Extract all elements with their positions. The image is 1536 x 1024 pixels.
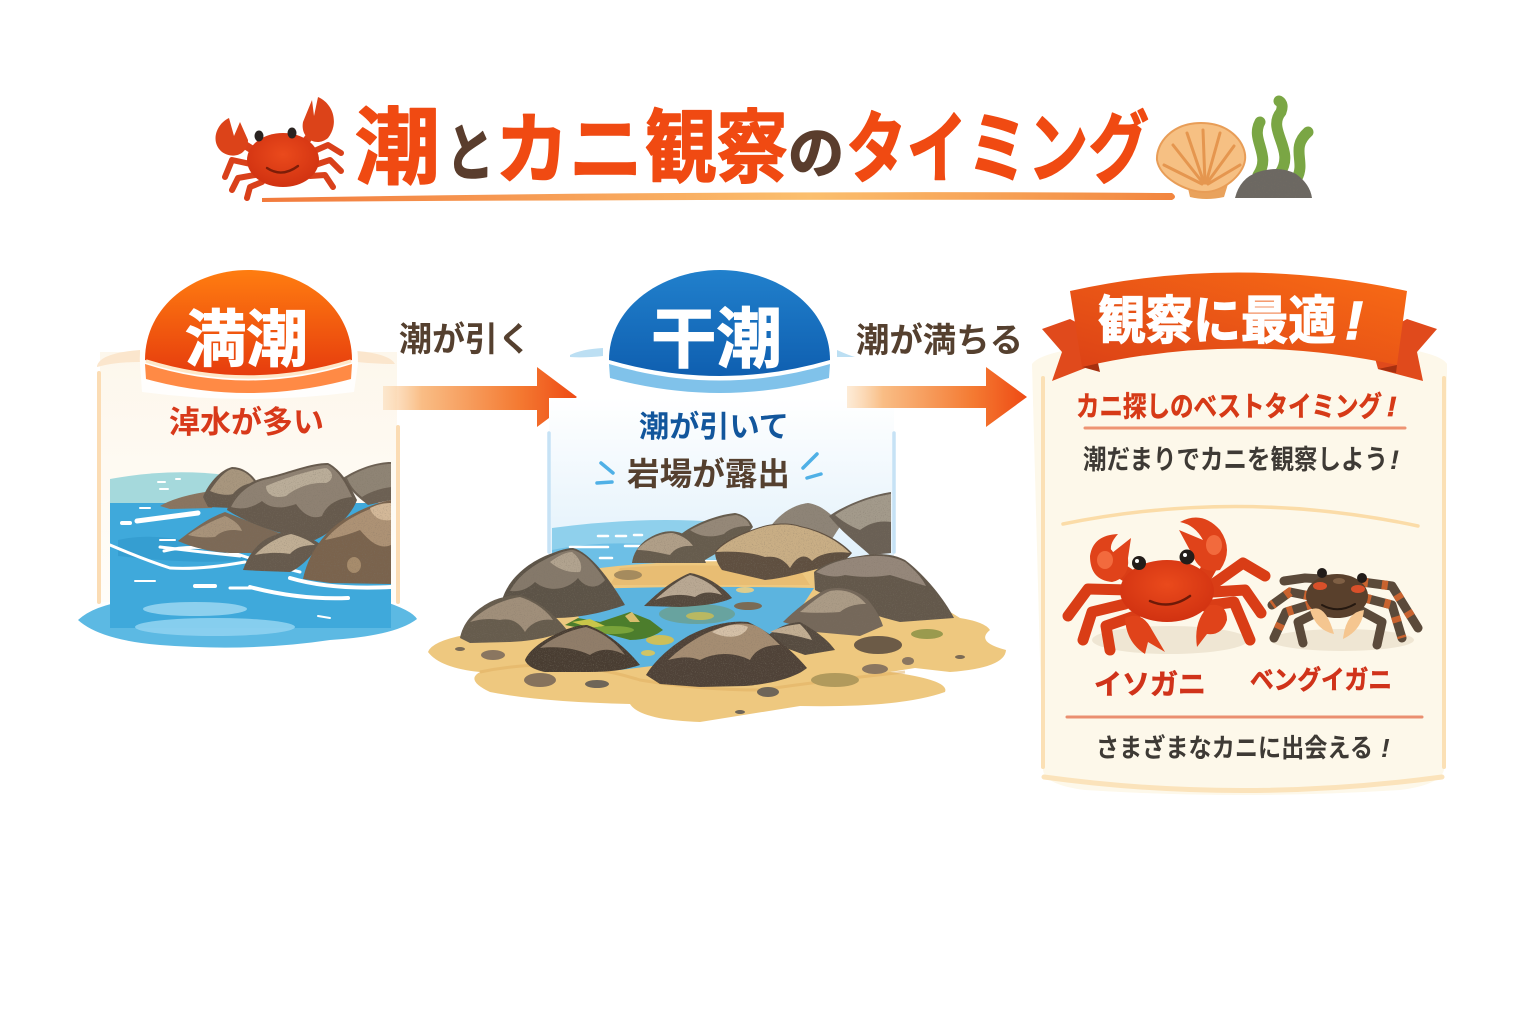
text: observe crabs in tide pools: ! [1390, 445, 1399, 475]
text: meet various crabs: さまざまなカニに出会える [1096, 733, 1373, 763]
tide pool [565, 587, 814, 670]
illustration: tidal flat [428, 492, 1006, 722]
divider under heading [1085, 426, 1405, 430]
panel frame rails [97, 350, 398, 602]
panel background [549, 398, 894, 558]
sea [110, 472, 391, 628]
rocks [460, 492, 954, 687]
badge: low tide [609, 270, 830, 393]
icon: scallop shell [1157, 123, 1245, 199]
title block [216, 97, 1312, 202]
label: brown crab name: ベングイガニ [1250, 665, 1392, 695]
panel: high tide [78, 264, 417, 648]
sea [552, 520, 760, 570]
divider above footer [1067, 716, 1422, 718]
panel: low tide [428, 270, 1006, 722]
title text: 観察 [645, 104, 788, 193]
text: observe crabs in tide pools: 潮だまりでカニを観察しよう [1083, 445, 1388, 475]
pebbles [455, 570, 965, 714]
illustration: water and rocks [78, 462, 417, 648]
badge: low tide: 干潮 [651, 302, 782, 376]
pool highlights [135, 602, 295, 636]
sparkle marks [597, 454, 821, 483]
rocks [160, 462, 391, 584]
label: tide rises: 潮が満ちる [856, 321, 1023, 360]
heading: best crab hunting timing: カニ探しのベストタイミング [1076, 390, 1382, 422]
title text: タイミング [846, 105, 1149, 193]
infographic canvas [78, 96, 1447, 795]
illustration: brown crab [1270, 568, 1418, 651]
outer water pool [78, 600, 417, 648]
ribbon banner: ! [1345, 291, 1363, 351]
illustration: red rock crab [1068, 518, 1265, 654]
curved divider [1063, 506, 1418, 526]
label: rock crab: イソガニ [1094, 669, 1206, 700]
caption: rocks exposed: 岩場が露出 [627, 456, 790, 492]
panel background [1032, 345, 1447, 795]
title underline [262, 192, 1175, 202]
caption: much seawater: 淖水が多い [169, 405, 324, 440]
caption: tide ebbing: 潮が引いて [639, 410, 789, 444]
title text: と [446, 120, 494, 189]
ribbon banner [1042, 272, 1437, 381]
panel background [100, 352, 397, 602]
arrow: high tide to low tide [383, 367, 577, 427]
panel: best time for observation [1032, 272, 1447, 795]
heading: best crab hunting timing: ! [1387, 391, 1396, 422]
label: tide ebbs: 潮が引く [399, 320, 531, 359]
arrow: low tide to best time [847, 367, 1027, 427]
sand [428, 561, 1006, 722]
icon: seaweed on rock [1235, 101, 1312, 198]
icon: red crab [216, 97, 341, 198]
text: meet various crabs: ! [1381, 733, 1390, 763]
seaweed patch [565, 612, 663, 640]
title text: カニ [495, 106, 643, 194]
title text: の [788, 122, 844, 185]
badge: high tide: 満潮 [185, 306, 308, 375]
badge: high tide [140, 264, 358, 399]
title text [355, 101, 1149, 195]
panel frame rails [1043, 378, 1444, 790]
title text: 潮 [355, 101, 440, 195]
ribbon banner: 観察に最適 [1098, 293, 1336, 351]
panel frame rails [549, 348, 894, 552]
